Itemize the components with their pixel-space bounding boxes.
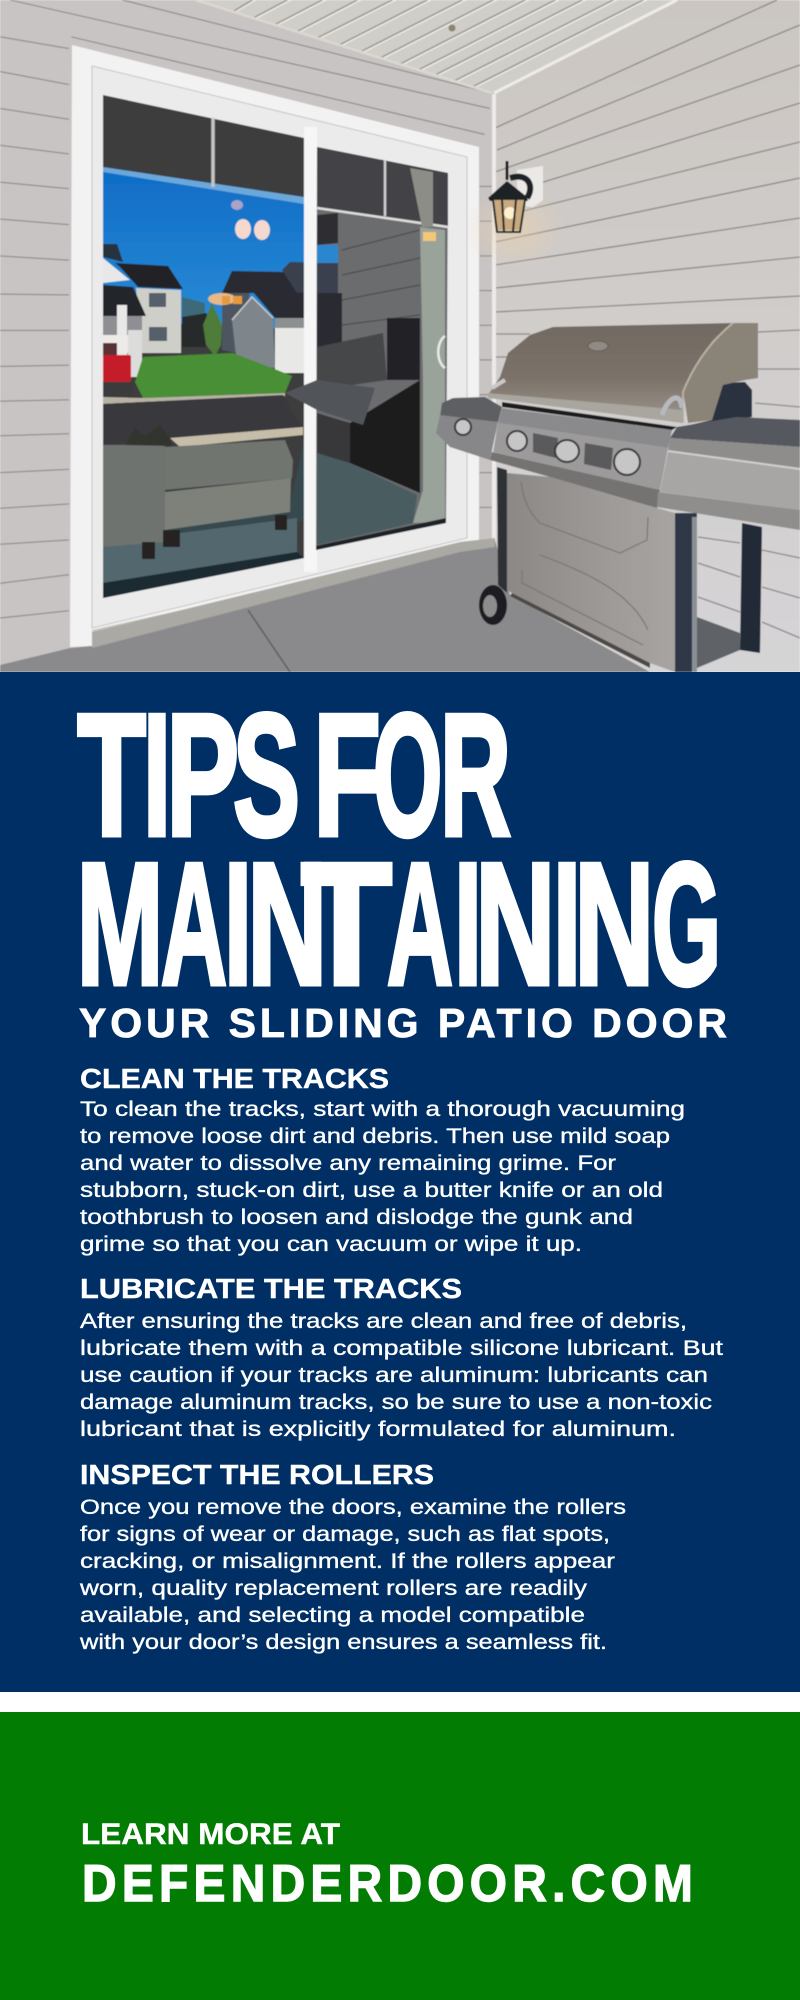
section: inspect the rollers: Once you remove the doors, examine the rollers — [80, 1496, 626, 1519]
title: tips for: F — [313, 677, 381, 872]
lid back shadow — [690, 382, 752, 425]
title: tips for — [77, 677, 511, 872]
lawn — [135, 353, 292, 398]
door frame — [92, 66, 467, 628]
centre stile — [304, 127, 317, 572]
control panel — [498, 408, 672, 448]
title: maintaining: I — [454, 826, 482, 1021]
section: lubricate the tracks — [80, 1273, 723, 1441]
vents — [533, 433, 613, 470]
section: lubricate the tracks: damage aluminum tracks, so be sure to use a non-toxic — [80, 1391, 712, 1414]
indoor rug — [317, 453, 417, 545]
left glass pane — [103, 95, 338, 598]
section: inspect the rollers: for signs of wear or damage, such as flat spots, — [80, 1523, 610, 1546]
title: tips for: P — [166, 677, 239, 872]
section: lubricate the tracks: LUBRICATE THE TRACKS — [80, 1273, 462, 1304]
navy content panel — [0, 672, 800, 1692]
left wall background — [0, 0, 495, 672]
gas grill — [436, 323, 800, 672]
learn more label: LEARN MORE AT — [81, 1818, 340, 1851]
title: tips for: I — [143, 677, 171, 872]
lid lip — [488, 393, 683, 423]
title: maintaining — [77, 826, 721, 1021]
title: maintaining: N — [247, 826, 327, 1021]
dark interior — [387, 318, 420, 380]
section: clean the tracks — [80, 1063, 685, 1256]
title: maintaining: N — [574, 826, 654, 1021]
corner post — [492, 94, 496, 544]
section: inspect the rollers: worn, quality replacement rollers are readily — [79, 1577, 588, 1600]
section: lubricate the tracks: lubricant that is explicitly formulated for aluminum. — [80, 1418, 676, 1441]
right wall siding lines — [495, 0, 800, 638]
section: lubricate the tracks: use caution if your tracks are aluminum: lubricants can — [80, 1364, 708, 1387]
lid knob — [588, 341, 608, 351]
title: tips for: T — [77, 677, 146, 872]
left side shelf — [440, 397, 502, 422]
hero photo: patio door and grill — [0, 0, 800, 672]
title: maintaining: N — [475, 826, 555, 1021]
green call-to-action panel — [0, 1712, 800, 2000]
curtain — [410, 168, 433, 227]
curb — [170, 427, 303, 447]
door outer trim — [70, 45, 479, 647]
left leg — [497, 467, 507, 593]
title: tips for: R — [440, 677, 511, 872]
section: inspect the rollers: with your door’s design ensures a seamless fit. — [79, 1631, 607, 1654]
section: clean the tracks: toothbrush to loosen and dislodge the gunk and — [80, 1206, 633, 1229]
street — [103, 395, 303, 445]
section: inspect the rollers: available, and selecting a model compatible — [80, 1604, 585, 1627]
section: clean the tracks: and water to dissolve any remaining grime. For — [80, 1152, 616, 1175]
patio floor — [0, 538, 650, 672]
title: maintaining: A — [387, 826, 453, 1021]
reflected couch — [165, 440, 293, 490]
section: clean the tracks: To clean the tracks, start with a thorough vacuuming — [80, 1098, 685, 1121]
bottom shelf — [697, 617, 740, 668]
section: clean the tracks: grime so that you can vacuum or wipe it up. — [80, 1233, 582, 1256]
title: maintaining: G — [652, 826, 721, 1021]
lid side face — [683, 323, 758, 423]
ceiling light fixture — [448, 24, 456, 32]
reflected lamp — [423, 232, 436, 241]
plants on sill — [125, 425, 172, 446]
title: maintaining: I — [224, 826, 252, 1021]
left wall siding lines — [0, 0, 492, 618]
wheel — [479, 585, 507, 625]
section: inspect the rollers — [79, 1459, 626, 1654]
section: inspect the rollers: INSPECT THE ROLLERS — [80, 1459, 434, 1490]
cabinet — [507, 473, 675, 672]
ceiling fan reflection — [231, 200, 270, 240]
door handle — [438, 336, 445, 368]
right glass pane — [285, 147, 448, 550]
reflected rug — [103, 518, 297, 583]
right side shelf — [670, 417, 800, 447]
section: clean the tracks: to remove loose dirt and debris. Then use mild soap — [80, 1125, 670, 1148]
sidewalk — [103, 393, 285, 404]
section: clean the tracks: CLEAN THE TRACKS — [80, 1063, 389, 1094]
top window mullion — [211, 118, 215, 187]
subtitle: YOUR SLIDING PATIO DOOR — [79, 1000, 727, 1046]
title: maintaining: T — [301, 826, 392, 1021]
rear leg — [740, 523, 762, 653]
dark floor behind couch — [165, 440, 304, 560]
wall lamp — [465, 161, 565, 270]
front leg — [675, 513, 697, 672]
title: tips for: O — [373, 677, 442, 872]
section: lubricate the tracks: After ensuring the tracks are clean and free of debris, — [80, 1310, 687, 1333]
title: maintaining: I — [553, 826, 581, 1021]
title: tips for: S — [233, 677, 300, 872]
section: clean the tracks: stubborn, stuck-on dirt, use a butter knife or an old — [80, 1179, 663, 1202]
red car — [103, 343, 133, 397]
right wall background — [495, 0, 800, 672]
knobs — [455, 419, 640, 475]
title: maintaining: A — [161, 826, 227, 1021]
title: maintaining: M — [77, 826, 163, 1021]
section: inspect the rollers: cracking, or misalignment. If the rollers appear — [80, 1550, 615, 1573]
reflected houses — [103, 244, 338, 377]
sky reflection — [103, 168, 304, 330]
section: lubricate the tracks: lubricate them with a compatible silicone lubricant. But — [80, 1337, 723, 1360]
ceiling — [196, 0, 677, 93]
grill lid — [488, 323, 733, 423]
lid handle — [662, 398, 682, 415]
website address: DEFENDERDOOR.COM — [82, 1854, 693, 1912]
